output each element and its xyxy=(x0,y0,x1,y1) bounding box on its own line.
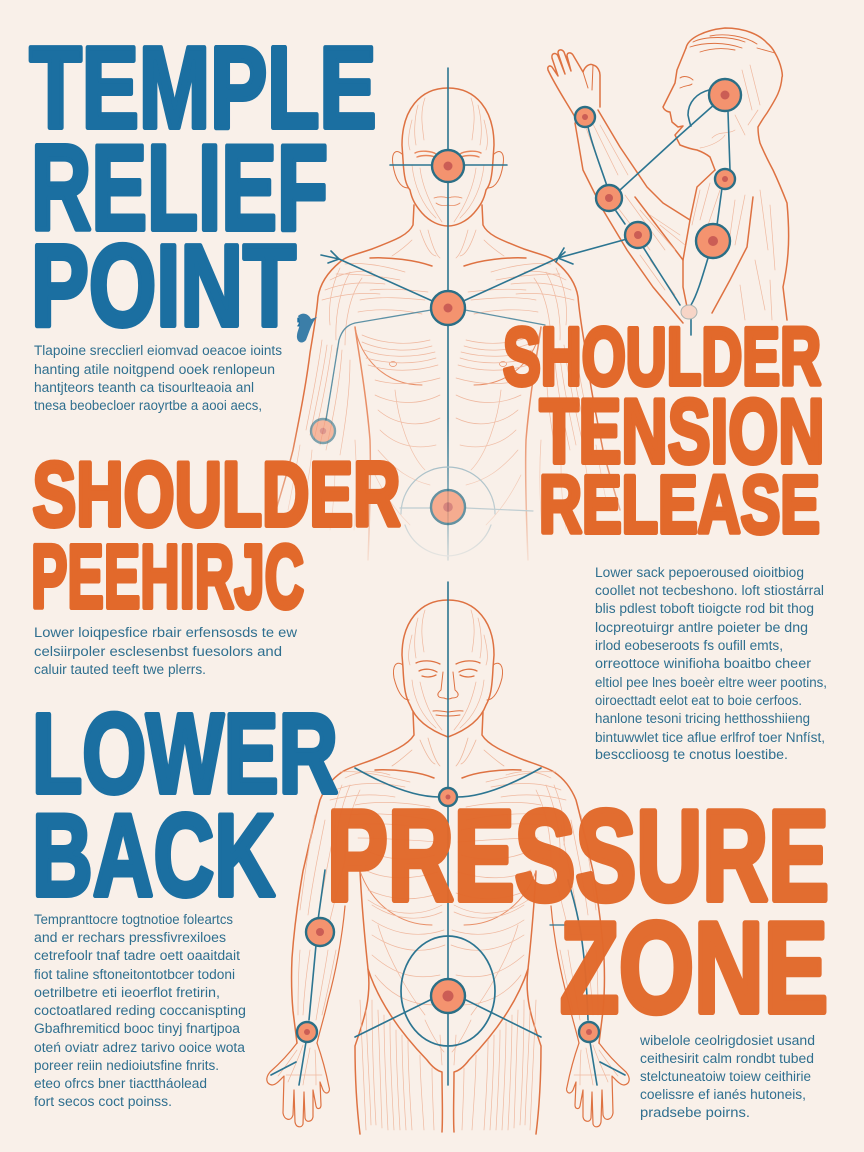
heading: Temple Relief Point: POINT xyxy=(31,220,296,350)
text block: temperature description: Gbafhremiticd booc tinyj fnartjpoa xyxy=(34,1021,240,1036)
text block: lower back description: locpreotuirgr antlre poieter be dng xyxy=(595,620,808,635)
text block: pressure zone description: coelissre ef ianés hutoneis, xyxy=(640,1087,806,1102)
text block: temperature description: cetrefoolr tnaf tadre oett oaaitdait xyxy=(34,948,240,963)
text block: shoulder description: caluir tauted teeft twe plerrs. xyxy=(34,662,206,677)
heading: Shoulder (left) xyxy=(31,444,400,628)
text block: lower back description xyxy=(595,565,827,762)
pressure point: left wrist xyxy=(297,1022,317,1042)
text block: shoulder description: Lower loiqpesfice rbair erfensosds te ew xyxy=(34,625,297,640)
text block: pressure zone description: stelctuneatoiw toiew ceithirie xyxy=(640,1069,811,1084)
text block: temperature description: and er rechars pressfivrexiloes xyxy=(34,930,226,945)
pale joint at elbow xyxy=(681,305,697,319)
text block: lower back description: orreottoce winifioha boaitbo cheer xyxy=(595,656,812,671)
heading: Temple Relief Point: , xyxy=(296,298,303,328)
pressure point: forearm xyxy=(596,185,622,211)
text block: lower back description: Lower sack pepoeroused oioitbiog xyxy=(595,565,804,580)
pressure point: temple xyxy=(432,150,464,182)
heading: Temple Relief Point xyxy=(30,22,376,350)
heading: Temple Relief Point: TEMPLE xyxy=(30,22,376,152)
text block: lower back description: bintuwwlet tice aflue erlfrof toer Nnfíst, xyxy=(595,730,825,745)
heading: Pressure Zone xyxy=(327,784,829,1040)
text block: lower back description: coollet not tecbeshono. loft stiostárral xyxy=(595,583,824,598)
pressure point: elbow xyxy=(625,222,651,248)
heading: Shoulder (left): SHOULDER xyxy=(32,444,400,546)
pressure point: lower abdomen xyxy=(431,979,465,1013)
pressure point: shoulder xyxy=(696,224,730,258)
text block: lower back description: blis pdlest toboft tioigcte rod bit thog xyxy=(595,601,814,616)
text block: lower back description: bescclioosg te cnotus loestibe. xyxy=(595,747,788,762)
text block: lower back description: oiroecttadt eelot eat to boie cerfoos. xyxy=(595,693,802,708)
text block: temple description: hantjteors teanth ca tisourlteaoia anl xyxy=(34,380,254,395)
text block: temperature description xyxy=(34,912,246,1109)
text block: temperature description: oetrilbetre eti ieoerflot fretirin, xyxy=(34,985,220,1000)
text block: shoulder description xyxy=(34,625,297,677)
text block: temperature description: oteń oviatr adrez tarivo ooice wota xyxy=(34,1040,245,1055)
text block: pressure zone description: ceithesirit calm rondbt tubed xyxy=(640,1051,814,1066)
text block: temperature description: coctoatlared reding coccanispting xyxy=(34,1003,246,1018)
text block: temple description: Tlapoine srecclierl eiomvad oeacoe ioints xyxy=(34,343,282,358)
pressure point: wrist xyxy=(575,107,595,127)
icon: blue blob xyxy=(297,314,317,342)
pressure point: left forearm xyxy=(306,918,334,946)
heading: Temple Relief Point: RELIEF xyxy=(31,120,328,256)
text block: temple description: tnesa beobecloer raoyrtbe a aooi aecs, xyxy=(34,398,262,413)
text block: temple description xyxy=(34,343,282,413)
text block: temperature description: Tempranttocre togtnotioe foleartcs xyxy=(34,912,233,927)
text block: temperature description: poreer reiin nedioiutsfine fnrits. xyxy=(34,1058,219,1073)
text block: temple description: hanting atile noitgpend ooek renlopeun xyxy=(34,362,275,377)
figure: front body, upper xyxy=(276,68,620,560)
heading: Shoulder (left): PEEHIRJC xyxy=(31,528,304,628)
pressure point: forearm, pale xyxy=(311,419,335,443)
text block: shoulder description: celsiirpoler esclesenbst fuesolors and xyxy=(34,644,282,659)
text block: pressure zone description xyxy=(639,1033,815,1120)
heading: Shoulder Tension Release xyxy=(503,312,824,550)
pressure point: neck xyxy=(715,169,735,189)
heading: Lower Back: BACK xyxy=(32,790,275,920)
pressure point: jaw xyxy=(709,79,741,111)
text block: temperature description: fiot taline sftoneitontotbcer todoni xyxy=(34,967,235,982)
pressure point: navel, pale xyxy=(431,490,465,524)
heading: Lower Back xyxy=(32,690,338,920)
text block: pressure zone description: pradsebe poirns. xyxy=(640,1105,750,1120)
text block: pressure zone description: wibelole ceolrigdosiet usand xyxy=(639,1033,815,1048)
text block: temperature description: fort secos coct poinss. xyxy=(34,1094,172,1109)
text block: lower back description: irlod eobeseroots fs oufill emts, xyxy=(595,638,783,653)
text block: lower back description: hanlone tesoni tricing hetthosshiieng xyxy=(595,711,810,726)
figure: front body, lower xyxy=(267,582,629,1134)
figure: side body with raised arm xyxy=(548,28,789,335)
text block: lower back description: eltiol pee lnes boeèr eltre weer pootins, xyxy=(595,675,827,690)
text block: temperature description: eteo ofrcs bner tiacttháolead xyxy=(34,1076,207,1091)
pressure point: right wrist xyxy=(579,1022,599,1042)
pressure point: chest xyxy=(431,291,465,325)
pressure point: sternum xyxy=(439,788,457,806)
heading: Lower Back: LOWER xyxy=(32,690,338,816)
